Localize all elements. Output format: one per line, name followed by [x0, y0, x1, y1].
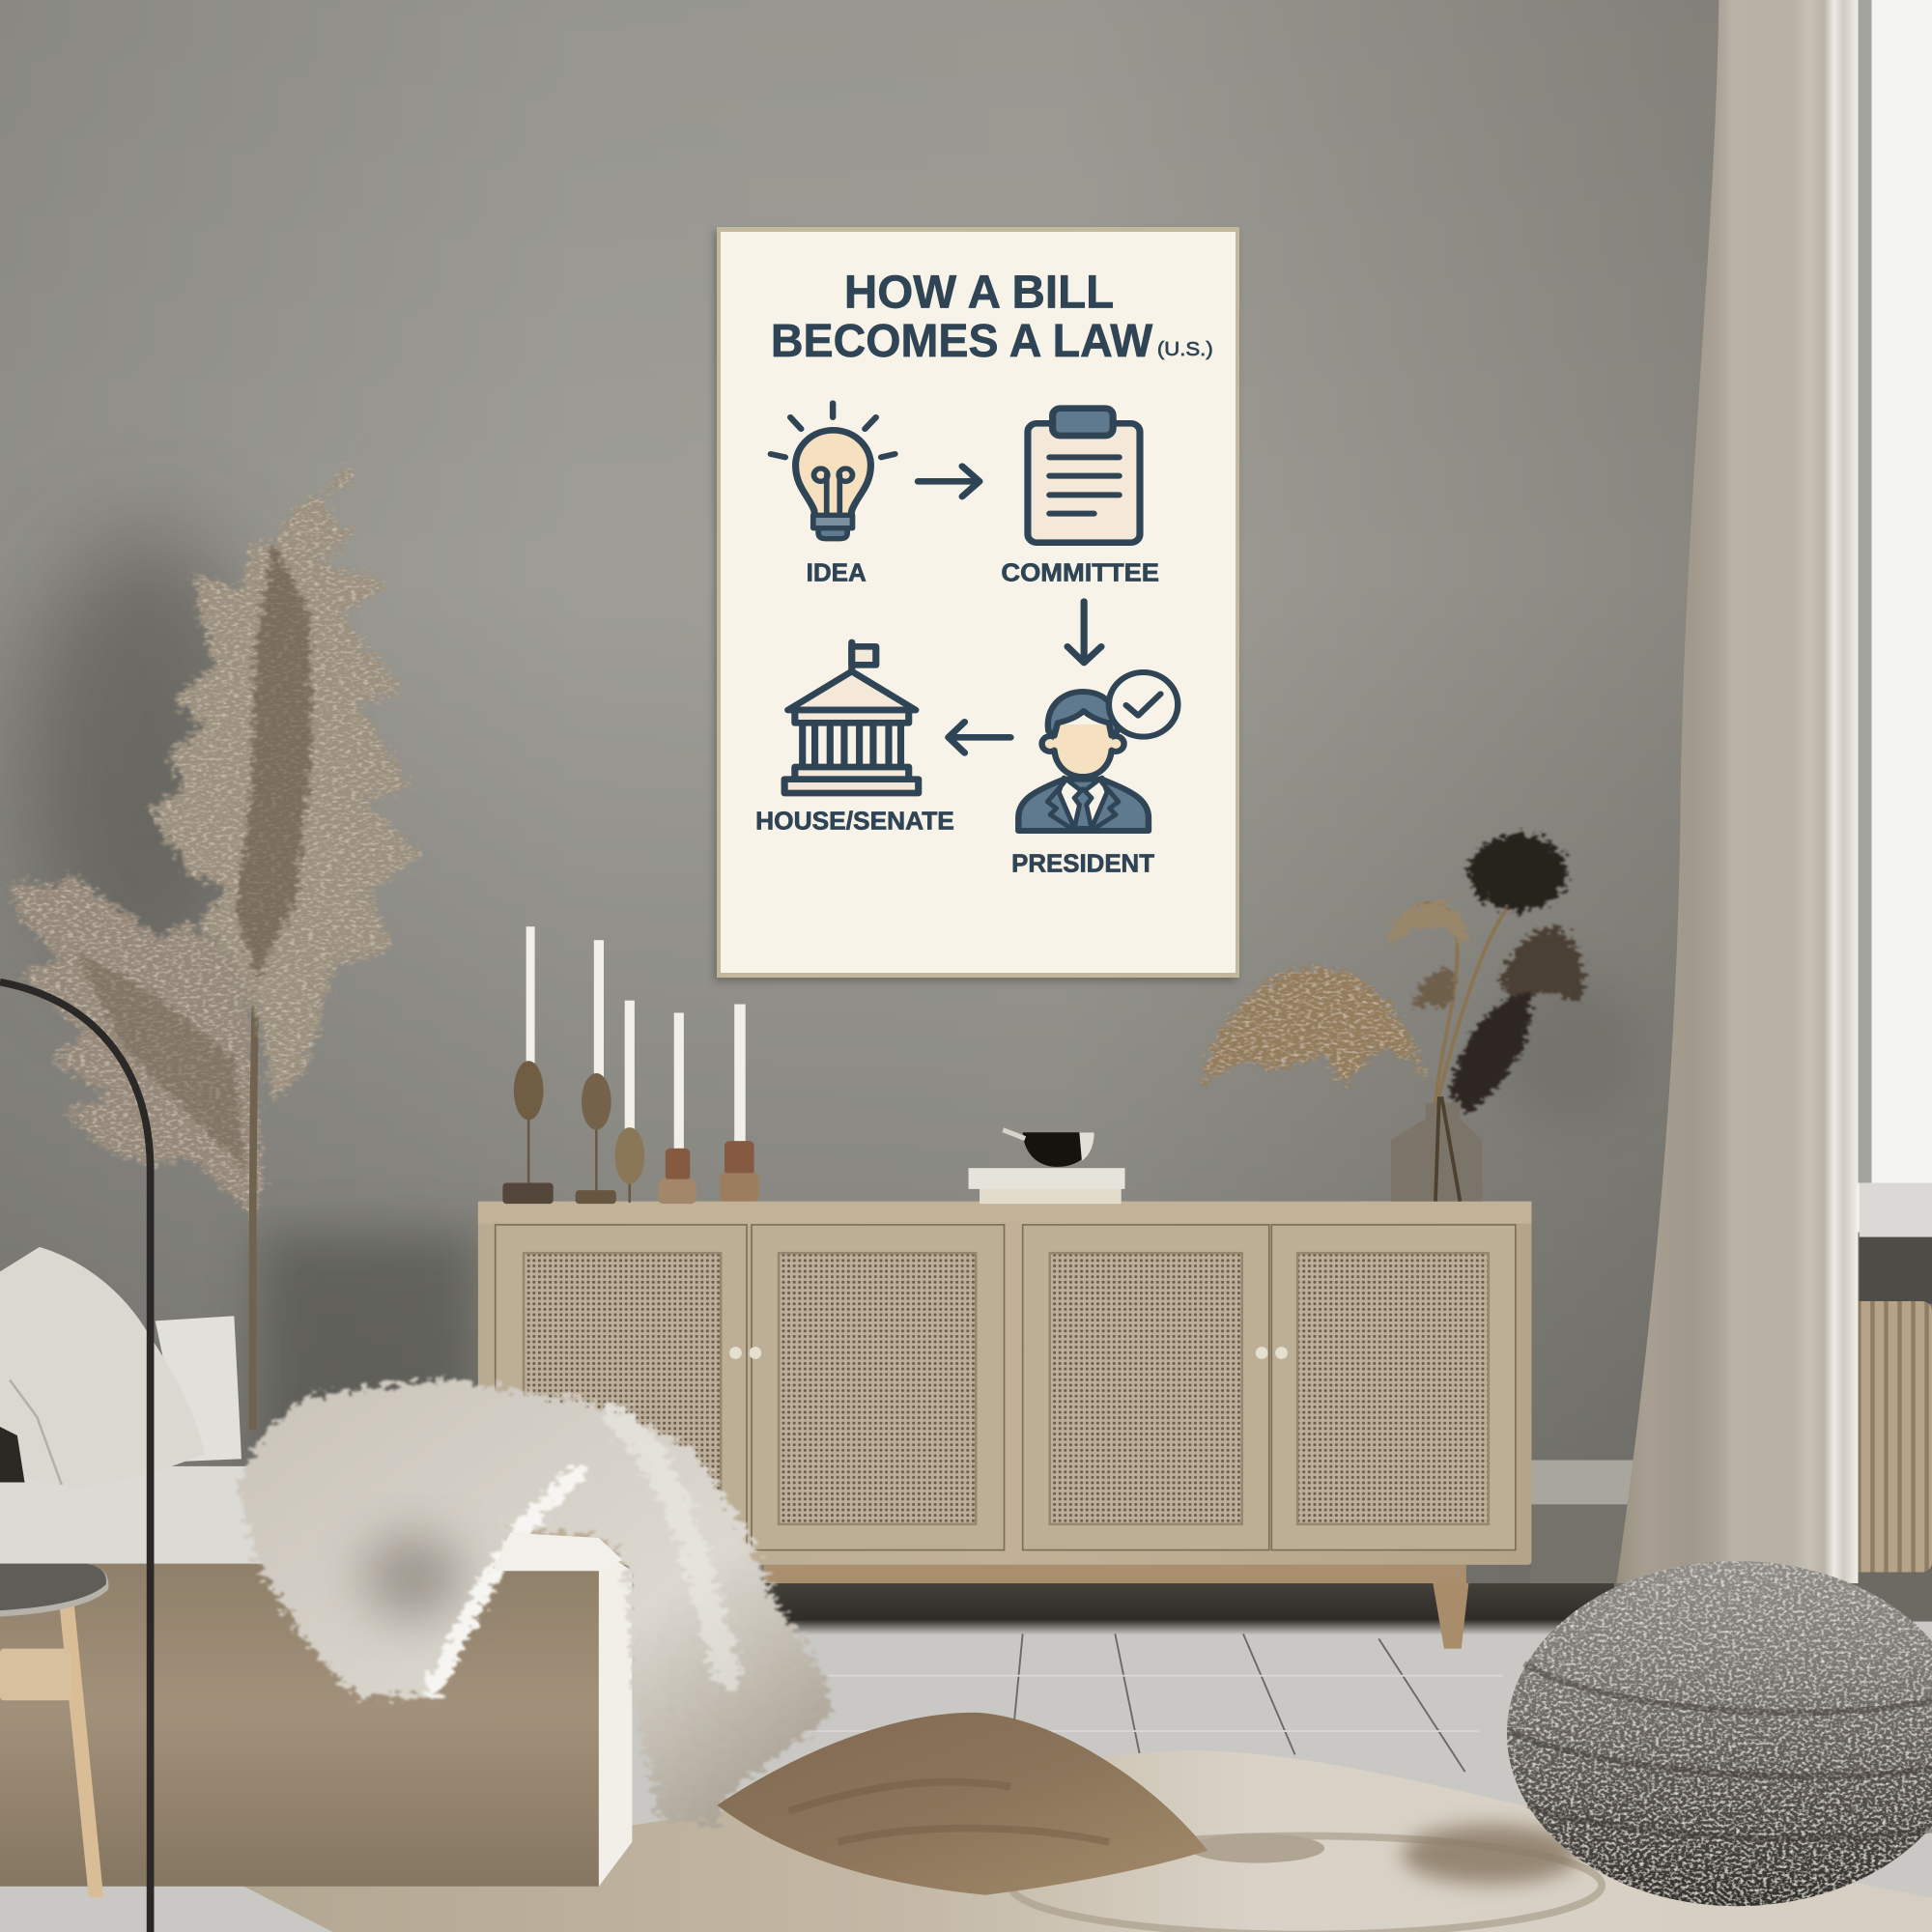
- floor tiles: [0, 1583, 1932, 1932]
- poster paper: [721, 232, 1236, 973]
- label: idea: IDEA: [807, 559, 867, 586]
- side table: [0, 1564, 108, 1897]
- main plume: [148, 437, 421, 1101]
- icon: president: [1018, 672, 1178, 831]
- candles: [502, 926, 759, 1204]
- dried plant in vase: [1202, 835, 1584, 1202]
- title: BECOMES A LAW: [771, 315, 1153, 367]
- window and radiator: [1848, 0, 1932, 1622]
- icon: capitol building: [784, 642, 919, 793]
- poster frame: [714, 227, 1239, 981]
- title: [771, 266, 1213, 367]
- poster top: title, idea and committee: [771, 266, 1213, 586]
- books and bowl: [969, 1130, 1125, 1204]
- arrow: idea to committee: [918, 467, 980, 497]
- title: (U.S.): [1157, 338, 1213, 360]
- second plume: [10, 872, 265, 1216]
- arrow: president to house: [949, 722, 1010, 753]
- fur throw: [238, 1378, 832, 1826]
- icon: light bulb: [771, 403, 895, 539]
- pillow: [0, 1247, 205, 1488]
- sideboard: [478, 1202, 1531, 1649]
- pampas plant left: [10, 437, 421, 1430]
- label: committee: COMMITTEE: [1001, 559, 1159, 586]
- pouf: [1507, 1561, 1932, 1906]
- cushion: [156, 1316, 242, 1462]
- poster bottom: house, president: [755, 602, 1178, 877]
- arrow: committee to president: [1067, 602, 1101, 663]
- curtain: [1616, 0, 1858, 1583]
- sofa: [0, 1247, 632, 1887]
- label: president: PRESIDENT: [1011, 850, 1155, 877]
- velvet pillow: [717, 1713, 1208, 1895]
- doors: [496, 1225, 1516, 1550]
- arc floor lamp: [0, 982, 151, 1932]
- label: house/senate: HOUSE/SENATE: [755, 808, 954, 835]
- rug: [244, 1750, 1932, 1932]
- icon: clipboard: [1028, 409, 1140, 543]
- cane panels: [524, 1253, 1489, 1524]
- stem: [252, 939, 258, 1430]
- cabinet body: [478, 1205, 1531, 1565]
- door handles: [729, 1347, 1288, 1359]
- title: HOW A BILL: [844, 266, 1114, 318]
